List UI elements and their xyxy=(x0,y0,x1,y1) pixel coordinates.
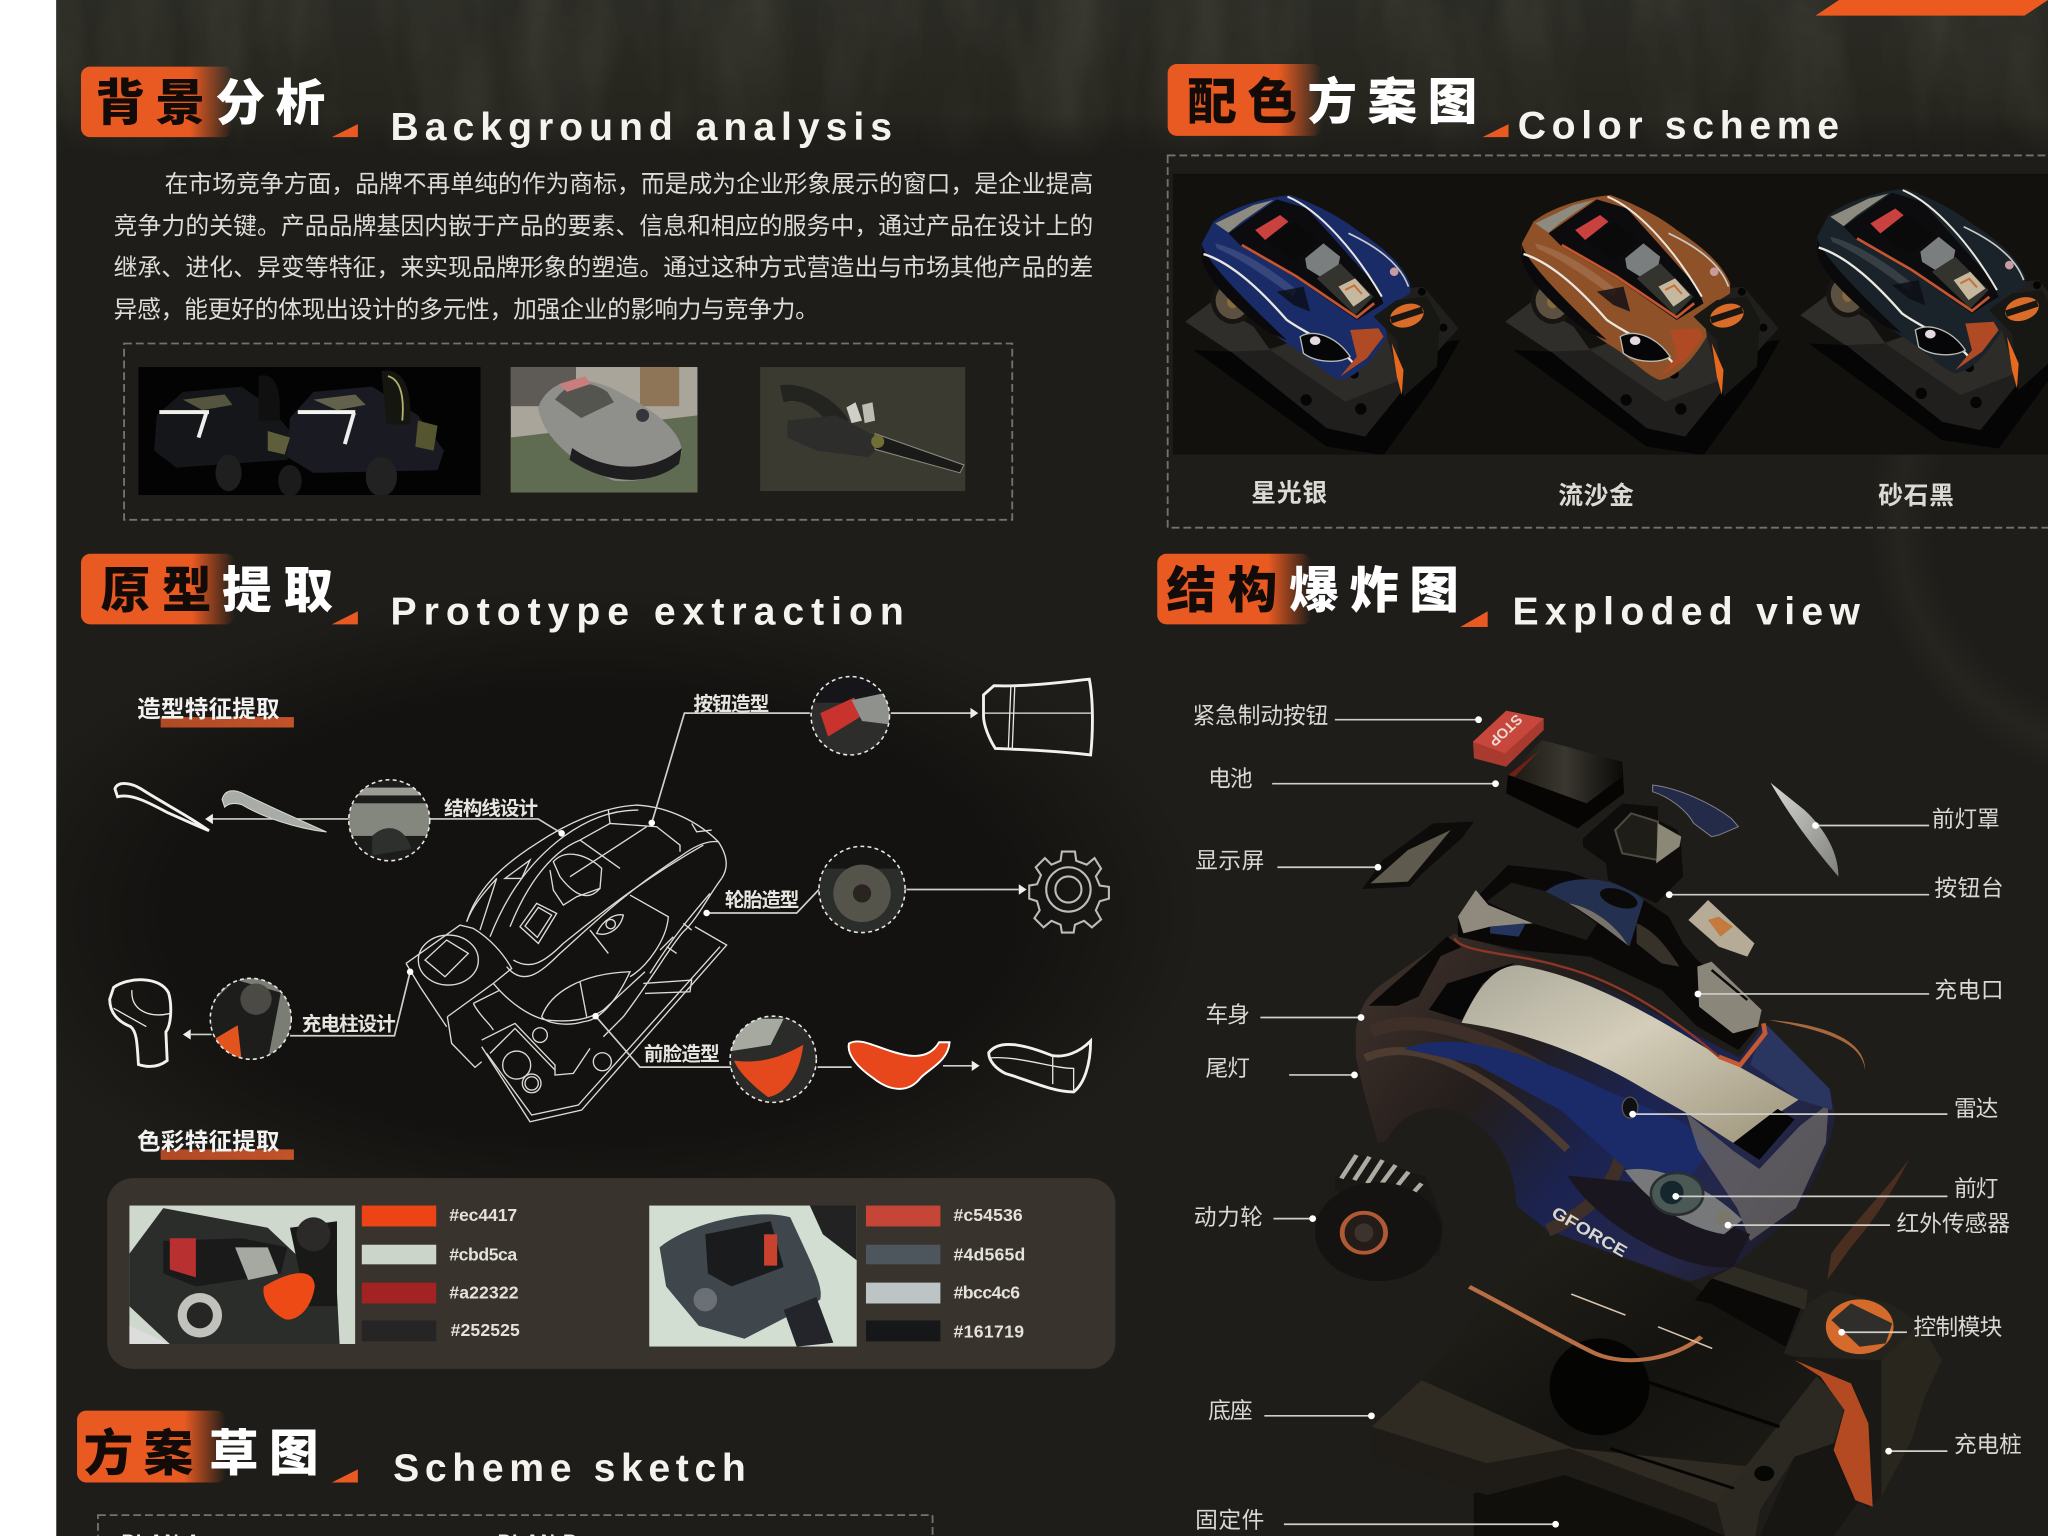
part: body xyxy=(1356,934,1835,1281)
part: tail fin xyxy=(1769,1020,1865,1070)
label: emergency stop xyxy=(1192,698,1482,731)
heading: background analysis xyxy=(81,63,892,149)
part: drive wheel xyxy=(1315,1153,1443,1281)
text block: background paragraph: 竞争力的关键。产品品牌基因内嵌于产品的要素、信息和相应的服务中，通过产品在设计上的 xyxy=(114,206,1093,241)
label: charging pile: 充电桩 xyxy=(1954,1426,2022,1459)
panel: sketches xyxy=(98,1515,933,1536)
part: headlight cover xyxy=(1771,783,1838,877)
image: chainsaw xyxy=(760,367,965,491)
callout: charging post: 充电柱设计 xyxy=(302,1008,396,1037)
label: emergency stop: 紧急制动按钮 xyxy=(1192,698,1328,731)
callout: button form xyxy=(648,674,1092,826)
heading: prototype extraction: 提取 xyxy=(222,550,345,622)
robot: sand black xyxy=(1800,188,2048,448)
label: radar: 雷达 xyxy=(1954,1091,1998,1124)
icon: face outline xyxy=(989,1041,1091,1092)
heading: color scheme: 配色 xyxy=(1187,62,1307,134)
callout: front face xyxy=(592,1013,1091,1105)
icon: button outline xyxy=(984,679,1092,755)
label: tail light: 尾灯 xyxy=(1206,1050,1250,1083)
label: infrared sensor: 红外传感器 xyxy=(1896,1206,2010,1239)
text block: background paragraph: 继承、进化、异变等特征，来实现品牌形象的塑造。通过这种方式营造出与市场其他产品的差 xyxy=(114,248,1093,283)
icon: wheel crop xyxy=(818,864,905,932)
label: display xyxy=(1195,843,1381,876)
label: body: 车身 xyxy=(1206,997,1250,1030)
text block: background paragraph: 在市场竞争方面，品牌不再单纯的作为商标，而是成为企业形象展示的窗口，是企业提高 xyxy=(165,164,1093,199)
part: blue trim xyxy=(1653,785,1738,837)
callout: wheel form xyxy=(703,845,1109,934)
text block: background paragraph: 异感，能更好的体现出设计的多元性，加强企业的影响力与竞争力。 xyxy=(114,289,819,324)
heading: background analysis: Background analysis xyxy=(391,106,892,149)
label: battery xyxy=(1208,760,1499,793)
heading: color scheme xyxy=(1168,62,1839,147)
part: lower fin xyxy=(1827,1159,1910,1280)
part: upper assembly xyxy=(1362,711,1865,1070)
label: charging port xyxy=(1695,972,2004,1005)
heading: color scheme: Color scheme xyxy=(1518,104,1839,147)
label: headlight: 前灯 xyxy=(1954,1170,1998,1203)
swatch labels left: #cbd5ca xyxy=(449,1244,517,1264)
icon: button crop xyxy=(811,682,890,755)
swatch labels right: #bcc4c6 xyxy=(953,1282,1020,1302)
label: tail light xyxy=(1206,1050,1358,1083)
label: radar xyxy=(1629,1091,1998,1124)
diagram: exploded robot xyxy=(1315,711,1942,1536)
heading: color scheme: 方案图 xyxy=(1307,62,1488,134)
label: drive wheel xyxy=(1194,1199,1316,1232)
label: battery: 电池 xyxy=(1208,760,1253,793)
heading: background analysis: 背景 xyxy=(95,63,216,135)
image: grey robot mower xyxy=(511,367,697,492)
label: charging port: 充电口 xyxy=(1934,972,2004,1005)
panel: color extraction xyxy=(107,1178,1115,1369)
swatch labels left xyxy=(449,1205,520,1340)
callout: structure lines xyxy=(115,778,565,862)
label: base: 底座 xyxy=(1208,1392,1253,1425)
part: battery xyxy=(1506,740,1624,828)
part: stop button: STOP xyxy=(1484,711,1525,749)
part: button deck xyxy=(1583,803,1683,903)
label: silver: 星光银 xyxy=(1251,474,1327,510)
label: body xyxy=(1206,997,1364,1030)
heading: exploded view xyxy=(1157,550,1860,633)
icon: post crop xyxy=(209,977,293,1061)
labels: exploded view left xyxy=(1192,698,1559,1535)
subheading: color features: 色彩特征提取 xyxy=(137,1122,280,1156)
label: charging pile xyxy=(1885,1426,2022,1459)
label: button deck: 按钮台 xyxy=(1934,870,2004,903)
heading: prototype extraction: 原型 xyxy=(101,550,223,622)
heading: scheme sketch: Scheme sketch xyxy=(393,1447,746,1490)
icon: gear outline xyxy=(1029,852,1109,933)
icon: face crop xyxy=(729,1016,818,1105)
swatch labels left: #252525 xyxy=(451,1320,520,1340)
label: gold: 流沙金 xyxy=(1558,476,1634,512)
callout: front face: 前脸造型 xyxy=(644,1038,720,1067)
heading: prototype extraction xyxy=(81,550,904,633)
label: fixture xyxy=(1195,1502,1559,1535)
part: body: GFORCE xyxy=(1548,1203,1630,1261)
label: black: 砂石黑 xyxy=(1878,476,1954,512)
label: control module xyxy=(1838,1309,2002,1342)
heading: background analysis: 分析 xyxy=(216,63,336,135)
label: control module: 控制模块 xyxy=(1913,1309,2002,1342)
swatch labels right: #4d565d xyxy=(953,1244,1025,1264)
icon: face color shape xyxy=(849,1041,950,1089)
heading: prototype extraction: Prototype extraction xyxy=(391,590,904,633)
subheading: form features: 造型特征提取 xyxy=(137,690,280,724)
part: display screen xyxy=(1362,822,1474,889)
label: button deck xyxy=(1666,870,2004,903)
corner accent xyxy=(1816,0,2048,16)
label: headlight cover: 前灯罩 xyxy=(1932,801,2000,834)
panel: reference products xyxy=(124,344,1012,520)
robot: sand gold xyxy=(1505,195,1780,455)
label: infrared sensor xyxy=(1725,1206,2010,1239)
label: headlight xyxy=(1672,1170,1998,1203)
heading: exploded view: 爆炸图 xyxy=(1289,550,1469,622)
heading: scheme sketch: 方案 xyxy=(84,1414,204,1486)
panel: color schemes xyxy=(1168,155,2048,528)
diagram: wireframe robot xyxy=(406,805,727,1122)
callout: charging post xyxy=(110,968,413,1067)
image: robot side photo xyxy=(129,1206,355,1344)
heading: scheme sketch: 草图 xyxy=(209,1414,329,1486)
icon: structure crop xyxy=(347,778,431,862)
icon: post outline xyxy=(110,980,171,1067)
labels: exploded view right xyxy=(1629,801,2022,1459)
callout: wheel form: 轮胎造型 xyxy=(725,883,799,912)
swatch labels left: #a22322 xyxy=(449,1282,519,1302)
robot: starlight silver xyxy=(1185,195,1460,455)
callout: button form: 按钮造型 xyxy=(694,688,769,717)
text block: background paragraph xyxy=(114,164,1093,324)
image: robot top photo xyxy=(649,1206,857,1347)
label: base xyxy=(1208,1392,1375,1425)
heading: scheme sketch xyxy=(77,1411,746,1490)
label: fixture: 固定件 xyxy=(1195,1502,1264,1535)
icon: structure curve outline xyxy=(115,783,209,831)
part: stop button xyxy=(1473,711,1544,767)
icon: structure curve solid xyxy=(222,791,327,832)
swatch labels right: #c54536 xyxy=(953,1205,1023,1225)
callout: structure lines: 结构线设计 xyxy=(444,792,538,821)
swatch labels left: #ec4417 xyxy=(449,1205,517,1225)
part: charging base xyxy=(1372,1230,1942,1536)
heading: exploded view: Exploded view xyxy=(1512,590,1860,633)
swatch labels right: #161719 xyxy=(953,1321,1024,1341)
label: display: 显示屏 xyxy=(1195,843,1264,876)
heading: exploded view: 结构 xyxy=(1166,550,1289,622)
label: headlight cover xyxy=(1812,801,2000,834)
label: drive wheel: 动力轮 xyxy=(1194,1199,1263,1232)
part: top frame xyxy=(1454,865,1765,1065)
swatch labels right xyxy=(953,1205,1025,1341)
image: ride-on mowers xyxy=(138,367,481,496)
